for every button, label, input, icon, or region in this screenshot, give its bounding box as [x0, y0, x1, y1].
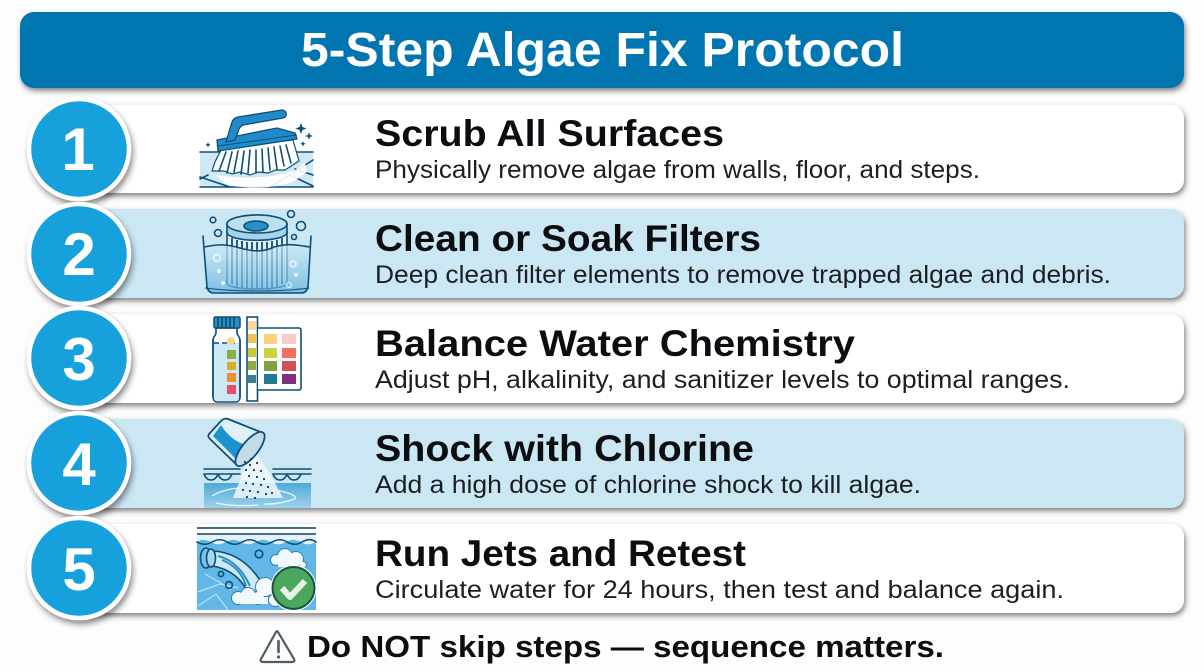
- step 4 number badge: 4: [62, 431, 96, 498]
- icon: filter soaking in water tub: [203, 210, 311, 293]
- step 2 heading: Clean or Soak Filters: [375, 217, 761, 259]
- icon: warning triangle: [261, 631, 294, 662]
- step 5 number badge: [29, 518, 129, 618]
- step 4 heading: Shock with Chlorine: [375, 427, 754, 469]
- step 2 description: Deep clean filter elements to remove trapped algae and debris.: [375, 261, 1111, 289]
- title banner: [20, 12, 1184, 88]
- step 1 number badge: [29, 99, 129, 199]
- icon: cup pouring chlorine into pool: [204, 419, 311, 508]
- step 1 heading: Scrub All Surfaces: [375, 112, 724, 154]
- step 5 heading: Run Jets and Retest: [375, 532, 747, 574]
- step 5 number badge: 5: [62, 536, 96, 603]
- step 1 number badge: 1: [61, 116, 95, 183]
- step 3 number badge: [29, 308, 129, 408]
- panel: step 2: [29, 204, 1184, 304]
- title: 5-Step Algae Fix Protocol: [301, 24, 904, 77]
- step 4 description: Add a high dose of chlorine shock to kill algae.: [375, 471, 921, 499]
- panel: step 4: [29, 413, 1184, 513]
- step 2 number badge: [29, 204, 129, 304]
- icon: test tube, strip and colour chart: [213, 317, 301, 402]
- panel: step 1: [29, 99, 1184, 199]
- step 1 description: Physically remove algae from walls, floor, and steps.: [375, 156, 980, 184]
- icon: scrub brush on tiles: [200, 110, 313, 188]
- step 3 description: Adjust pH, alkalinity, and sanitizer levels to optimal ranges.: [375, 366, 1070, 394]
- panel: step 3: [29, 308, 1184, 408]
- warning text: Do NOT skip steps — sequence matters.: [307, 629, 944, 664]
- step 5 description: Circulate water for 24 hours, then test and balance again.: [375, 576, 1064, 604]
- panel: step 5: [29, 518, 1184, 618]
- step 3 number badge: 3: [62, 326, 96, 393]
- icon: pool jet with check mark: [197, 528, 316, 611]
- step 4 number badge: [29, 413, 129, 513]
- step 3 heading: Balance Water Chemistry: [375, 322, 855, 364]
- footer warning: [261, 629, 944, 664]
- step 2 number badge: 2: [62, 221, 96, 288]
